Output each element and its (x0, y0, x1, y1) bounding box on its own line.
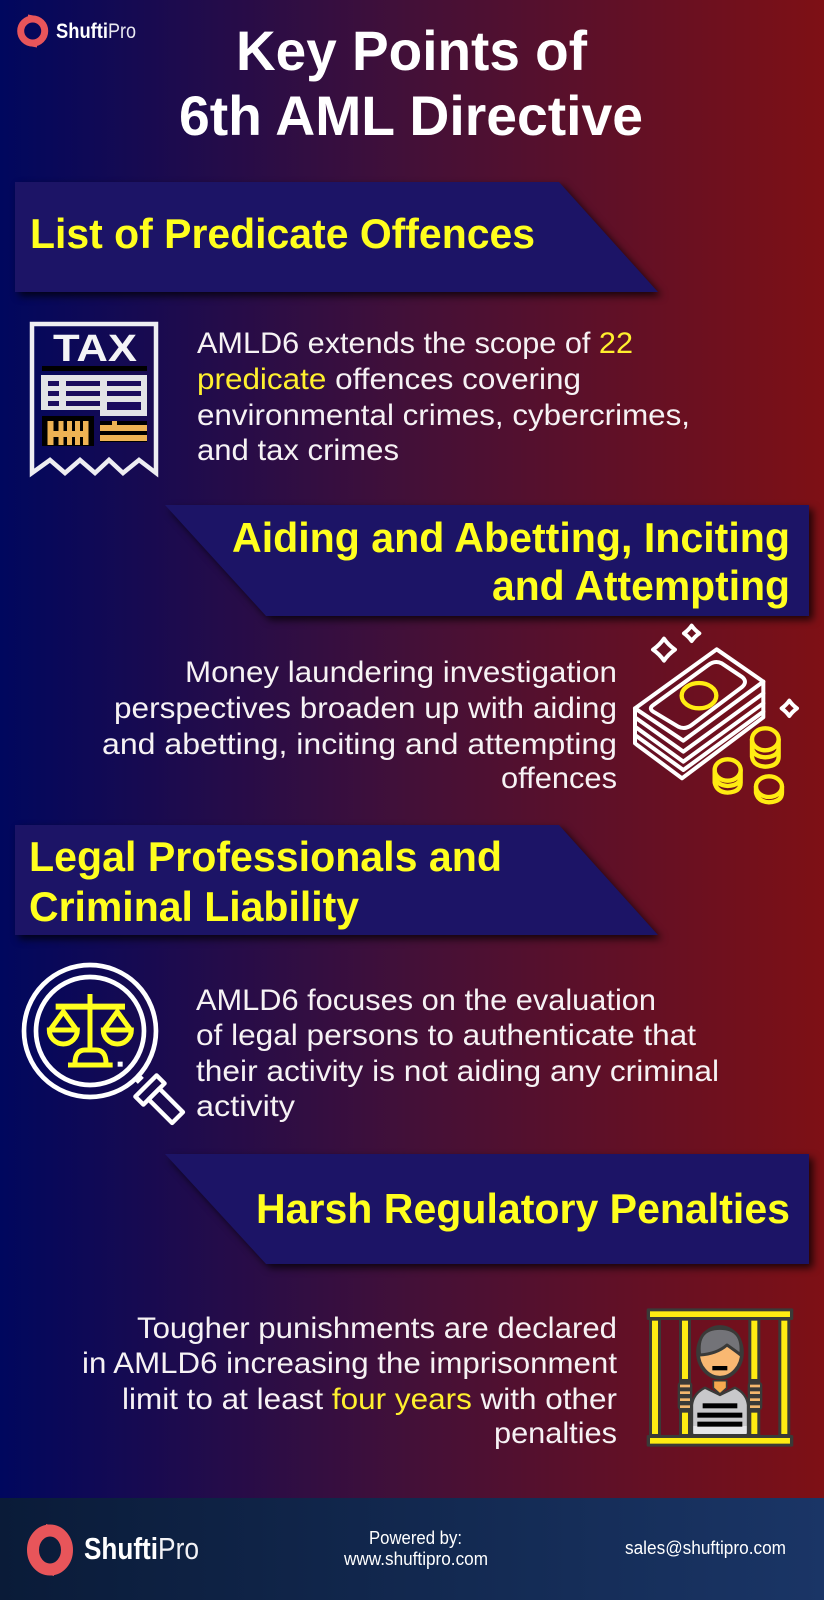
logo: ShuftiPro top: Pro (108, 20, 136, 43)
icon: prisoner behind bars (647, 1308, 793, 1447)
icon: tax receipt: TAX (53, 328, 138, 370)
text: harsh penalties: limit to at least four years with other (122, 1383, 617, 1416)
banner heading 4 (165, 1154, 809, 1264)
panel: aiding and abetting (102, 505, 809, 802)
text: legal professionals (196, 984, 719, 1123)
banner heading 1 (15, 182, 658, 292)
title: Key Points of (236, 19, 587, 82)
contact email: sales@shuftipro.com (625, 1537, 786, 1558)
footer logo: Shufti (84, 1531, 158, 1566)
banner heading 4: Harsh Regulatory Penalties (256, 1185, 790, 1232)
text: harsh penalties: Tougher punishments are declared (137, 1312, 617, 1345)
text: legal professionals: AMLD6 focuses on the evaluation (196, 984, 656, 1017)
icon: scales in magnifier (24, 965, 188, 1128)
panel: legal professionals (15, 825, 719, 1128)
footer logo: Pro (158, 1531, 199, 1566)
icon: money stack and coins (635, 626, 797, 802)
banner heading 3: Legal Professionals and (29, 833, 502, 880)
text: predicate offences: predicate offences covering (197, 363, 581, 396)
banner heading 2 (165, 505, 809, 616)
powered by text: Powered by: (369, 1527, 462, 1548)
banner heading 2: Aiding and Abetting, Inciting (232, 514, 790, 561)
logo: ShuftiPro top (21, 14, 136, 48)
footer logo (33, 1524, 199, 1576)
title (179, 19, 643, 147)
text: harsh penalties: penalties (494, 1417, 617, 1450)
logo: ShuftiPro top: Shufti (56, 20, 108, 43)
title: 6th AML Directive (179, 84, 643, 147)
banner heading 3 (15, 825, 658, 935)
text: legal professionals: of legal persons to authenticate that (196, 1019, 697, 1052)
powered by text: www.shuftipro.com (343, 1548, 488, 1569)
text: predicate offences: environmental crimes, cybercrimes, (197, 399, 690, 432)
text: harsh penalties (82, 1312, 618, 1450)
text: predicate offences: and tax crimes (197, 434, 399, 467)
text: aiding and abetting (102, 656, 617, 795)
banner heading 1: List of Predicate Offences (30, 210, 535, 257)
text: aiding and abetting: perspectives broaden up with aiding (114, 692, 617, 725)
banner heading 2: and Attempting (492, 562, 790, 609)
banner heading 3: Criminal Liability (29, 883, 360, 930)
text: predicate offences: AMLD6 extends the scope of 22 (197, 327, 633, 360)
panel: harsh penalties (82, 1154, 809, 1450)
text: predicate offences (197, 327, 690, 467)
text: aiding and abetting: and abetting, inciting and attempting (102, 728, 617, 761)
text: legal professionals: activity (196, 1090, 295, 1123)
powered by text (343, 1527, 488, 1569)
text: aiding and abetting: offences (501, 762, 617, 795)
text: legal professionals: their activity is not aiding any criminal (196, 1055, 719, 1088)
panel: list of predicate offences (15, 182, 690, 473)
icon: tax receipt (32, 324, 156, 473)
footer (0, 1498, 824, 1600)
text: harsh penalties: in AMLD6 increasing the imprisonment (82, 1347, 618, 1380)
text: aiding and abetting: Money laundering investigation (185, 656, 617, 689)
